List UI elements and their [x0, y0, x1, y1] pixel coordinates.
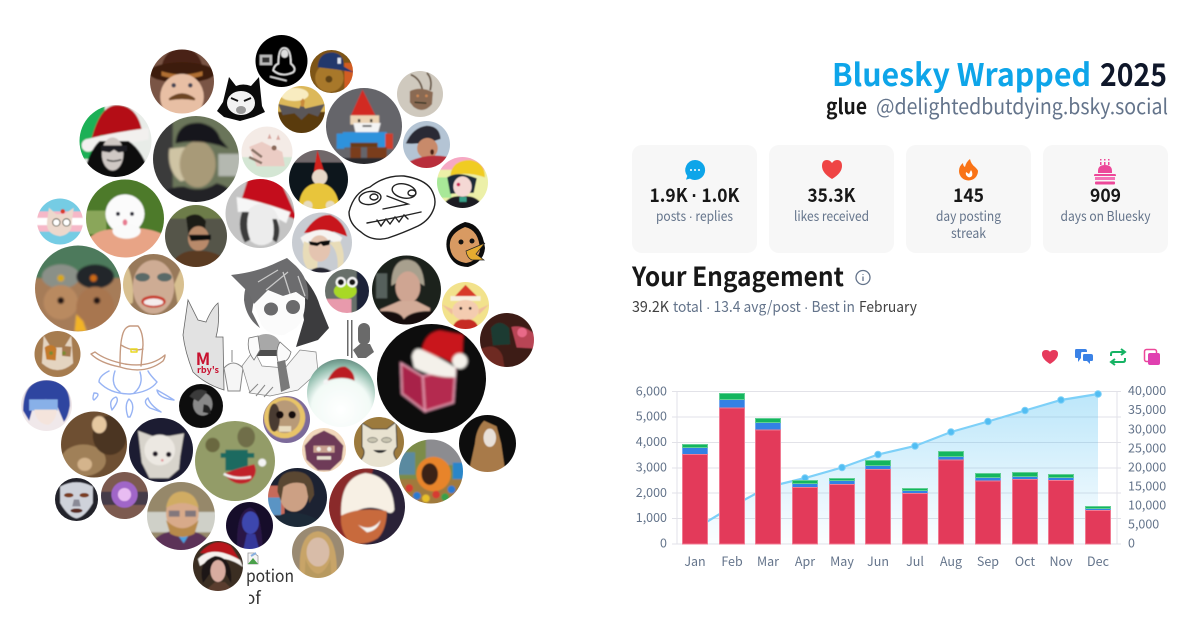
avatar: pixel elf santa — [442, 282, 489, 329]
engagement chart — [636, 380, 1166, 570]
avatar: two bears in ushankas — [35, 246, 121, 332]
avatar: black cat sticker — [217, 77, 265, 121]
right axis labels: 30,000 — [1128, 418, 1166, 438]
drink cup — [224, 350, 243, 391]
avatar: blonde woman — [289, 523, 347, 581]
right axis labels: 0 — [1128, 532, 1135, 552]
stat value: 1.9K · 1.0K — [650, 181, 740, 208]
broken image with alt text — [245, 553, 294, 609]
stat label: posts · replies — [656, 205, 733, 225]
left axis labels: 0 — [660, 532, 667, 552]
month labels: Aug — [940, 551, 962, 570]
right axis labels: 35,000 — [1128, 399, 1166, 418]
engagement summary: total · 13.4 avg/post · Best in — [673, 296, 855, 317]
month labels: Dec — [1087, 551, 1110, 570]
avatar: green toaster santa — [195, 421, 275, 501]
avatar: black circle line art — [256, 35, 308, 87]
avatar: anime girl eating burger: rby's — [197, 363, 220, 376]
engagement summary: February — [859, 296, 917, 317]
month labels: Nov — [1049, 551, 1073, 570]
avatar: green frog plush — [325, 269, 369, 313]
avatar: brown fluffy cat — [61, 412, 127, 478]
avatar: blonde woman santa hat — [292, 212, 352, 272]
stat card: posts and replies — [632, 145, 757, 253]
avatar: man with cap in car — [153, 116, 239, 202]
engagement summary: 39.2K — [632, 296, 669, 317]
avatar: calico cat — [34, 331, 80, 377]
hands — [248, 336, 291, 362]
face — [254, 291, 305, 335]
avatar: blue helmet hero — [21, 380, 72, 431]
body and shirt — [242, 350, 318, 396]
avatar: woman in dark hat painting — [403, 121, 450, 168]
stat value: 35.3K — [808, 181, 856, 208]
avatar: pale cat illustration — [242, 126, 292, 178]
month labels: May — [830, 551, 854, 570]
avatar: bean bird sticker — [446, 222, 485, 267]
avatar: yellow raincoat gnome — [289, 150, 348, 209]
left axis labels: 2,000 — [636, 482, 667, 501]
stat card: streak — [906, 145, 1031, 253]
icon: flame — [959, 159, 978, 180]
cumulative points — [802, 391, 1101, 481]
hair back and side locks — [296, 270, 329, 347]
month labels: Jun — [867, 551, 889, 570]
left axis labels: 3,000 — [636, 456, 667, 476]
stat value: 909 — [1090, 181, 1121, 208]
left axis labels: 5,000 — [636, 406, 667, 424]
avatar: cat drawing on tan — [354, 417, 404, 467]
right axis labels: 15,000 — [1128, 476, 1166, 494]
avatar: silver face — [55, 478, 98, 521]
avatar: red flames portrait — [480, 313, 534, 367]
stat label: days on Bluesky — [1060, 205, 1150, 225]
broken image with alt text: of — [245, 584, 262, 609]
right axis labels: 10,000 — [1128, 494, 1166, 514]
avatar: bat on golden sky — [278, 86, 325, 133]
avatar: cowboy hat moustache baby — [150, 50, 214, 114]
cumulative area — [695, 394, 1098, 544]
avatar: purple plasma — [101, 472, 148, 519]
avatar: hand drawn troll face — [349, 176, 435, 239]
legend icon: likes heart — [1042, 350, 1058, 364]
right axis labels: 40,000 — [1128, 380, 1166, 399]
avatar: anime girl eating burger — [183, 258, 329, 397]
stat value: 145 — [953, 181, 984, 208]
month labels: Oct — [1015, 551, 1035, 570]
avatar: blue lit girl — [224, 500, 275, 551]
month labels — [684, 551, 1110, 570]
avatar: halftone santa hat — [226, 179, 294, 248]
burger — [252, 334, 280, 356]
avatar: hat and eye drawing — [91, 326, 174, 417]
avatar: brown-haired man — [265, 465, 330, 530]
month labels: Jan — [684, 551, 706, 570]
avatar: glowing figure santa hat — [307, 359, 375, 425]
month labels: Mar — [757, 551, 779, 570]
avatar: girl with santa hat — [190, 538, 246, 594]
avatar: brown hooded monk — [459, 415, 516, 472]
necktie — [277, 360, 290, 392]
avatar: laughing santa — [325, 465, 409, 548]
avatar: burning figure in ball pit — [399, 440, 463, 504]
stat card: streak: streak — [951, 222, 986, 242]
stat card: days on Bluesky — [1043, 145, 1168, 253]
hair top with ear tuft — [231, 258, 308, 304]
avatar: woman in black lace — [372, 256, 441, 324]
avatar: skull — [263, 396, 310, 443]
chart legend — [1042, 349, 1160, 365]
legend icon: reposts — [1111, 349, 1125, 365]
avatar: santa hat emperor on green — [80, 105, 152, 177]
avatar: white kitten — [129, 418, 193, 482]
avatar: anime girl rainbow — [437, 157, 488, 208]
month labels: Apr — [795, 551, 815, 570]
avatar: man in sunglasses — [165, 205, 227, 267]
avatar: pixel gnome — [326, 88, 402, 164]
legend icon: quotes — [1144, 350, 1160, 365]
avatar: medieval devil sketch — [397, 71, 443, 117]
stat label: day posting — [936, 205, 1001, 225]
stat card: likes — [769, 145, 894, 253]
avatar: woman with glasses and distorted mouth — [123, 254, 184, 315]
avatar collage — [18, 32, 537, 609]
avatar: tiny white pomeranian — [86, 180, 164, 258]
fries — [249, 384, 273, 397]
avatar: blond man with glasses — [147, 482, 215, 550]
icon: info — [856, 270, 870, 284]
section heading: Your Engagement: Your Engagement — [631, 257, 844, 294]
flame centre — [966, 170, 972, 177]
left axis labels — [636, 380, 667, 552]
stacked bars — [682, 394, 1110, 544]
avatar: trans flag cat with glasses — [37, 198, 83, 244]
right axis labels — [1128, 380, 1166, 552]
avatar: ornate demon — [302, 428, 346, 472]
bars: likes segments — [682, 408, 1110, 544]
bag logo: M — [196, 345, 210, 370]
icon: heart — [822, 160, 842, 179]
display name and handle: glue — [826, 91, 867, 121]
legend icon: replies — [1075, 349, 1093, 364]
left axis labels: 4,000 — [636, 431, 667, 450]
month labels: Sep — [977, 551, 999, 570]
left axis labels: 1,000 — [636, 507, 667, 526]
bars: replies segments — [682, 400, 1110, 510]
grid lines — [672, 391, 1121, 544]
icon: chat bubble — [685, 160, 705, 180]
broken image with alt text: potion — [246, 562, 294, 587]
stat label: likes received — [794, 205, 869, 225]
right axis labels: 20,000 — [1128, 456, 1166, 476]
title: 2025 — [1100, 50, 1167, 95]
bars: reposts segments — [682, 394, 1110, 508]
month labels: Jul — [906, 551, 924, 570]
right axis labels: 25,000 — [1128, 438, 1166, 456]
left axis labels: 6,000 — [636, 380, 667, 400]
engagement summary — [632, 296, 917, 317]
right axis labels: 5,000 — [1128, 514, 1159, 532]
avatar: microphone figure — [347, 320, 374, 358]
cumulative line — [695, 394, 1098, 529]
avatar: dark man black and white — [179, 384, 223, 428]
display name and handle: @delightedbutdying.bsky.social — [876, 91, 1168, 121]
avatar: blue cap frog — [310, 50, 353, 93]
horse ears and burger bag — [183, 300, 224, 390]
title: Bluesky Wrapped — [832, 50, 1091, 95]
avatar: red crate with santa hat — [377, 324, 486, 433]
icon: birthday cake — [1094, 159, 1116, 184]
month labels: Feb — [721, 551, 743, 570]
